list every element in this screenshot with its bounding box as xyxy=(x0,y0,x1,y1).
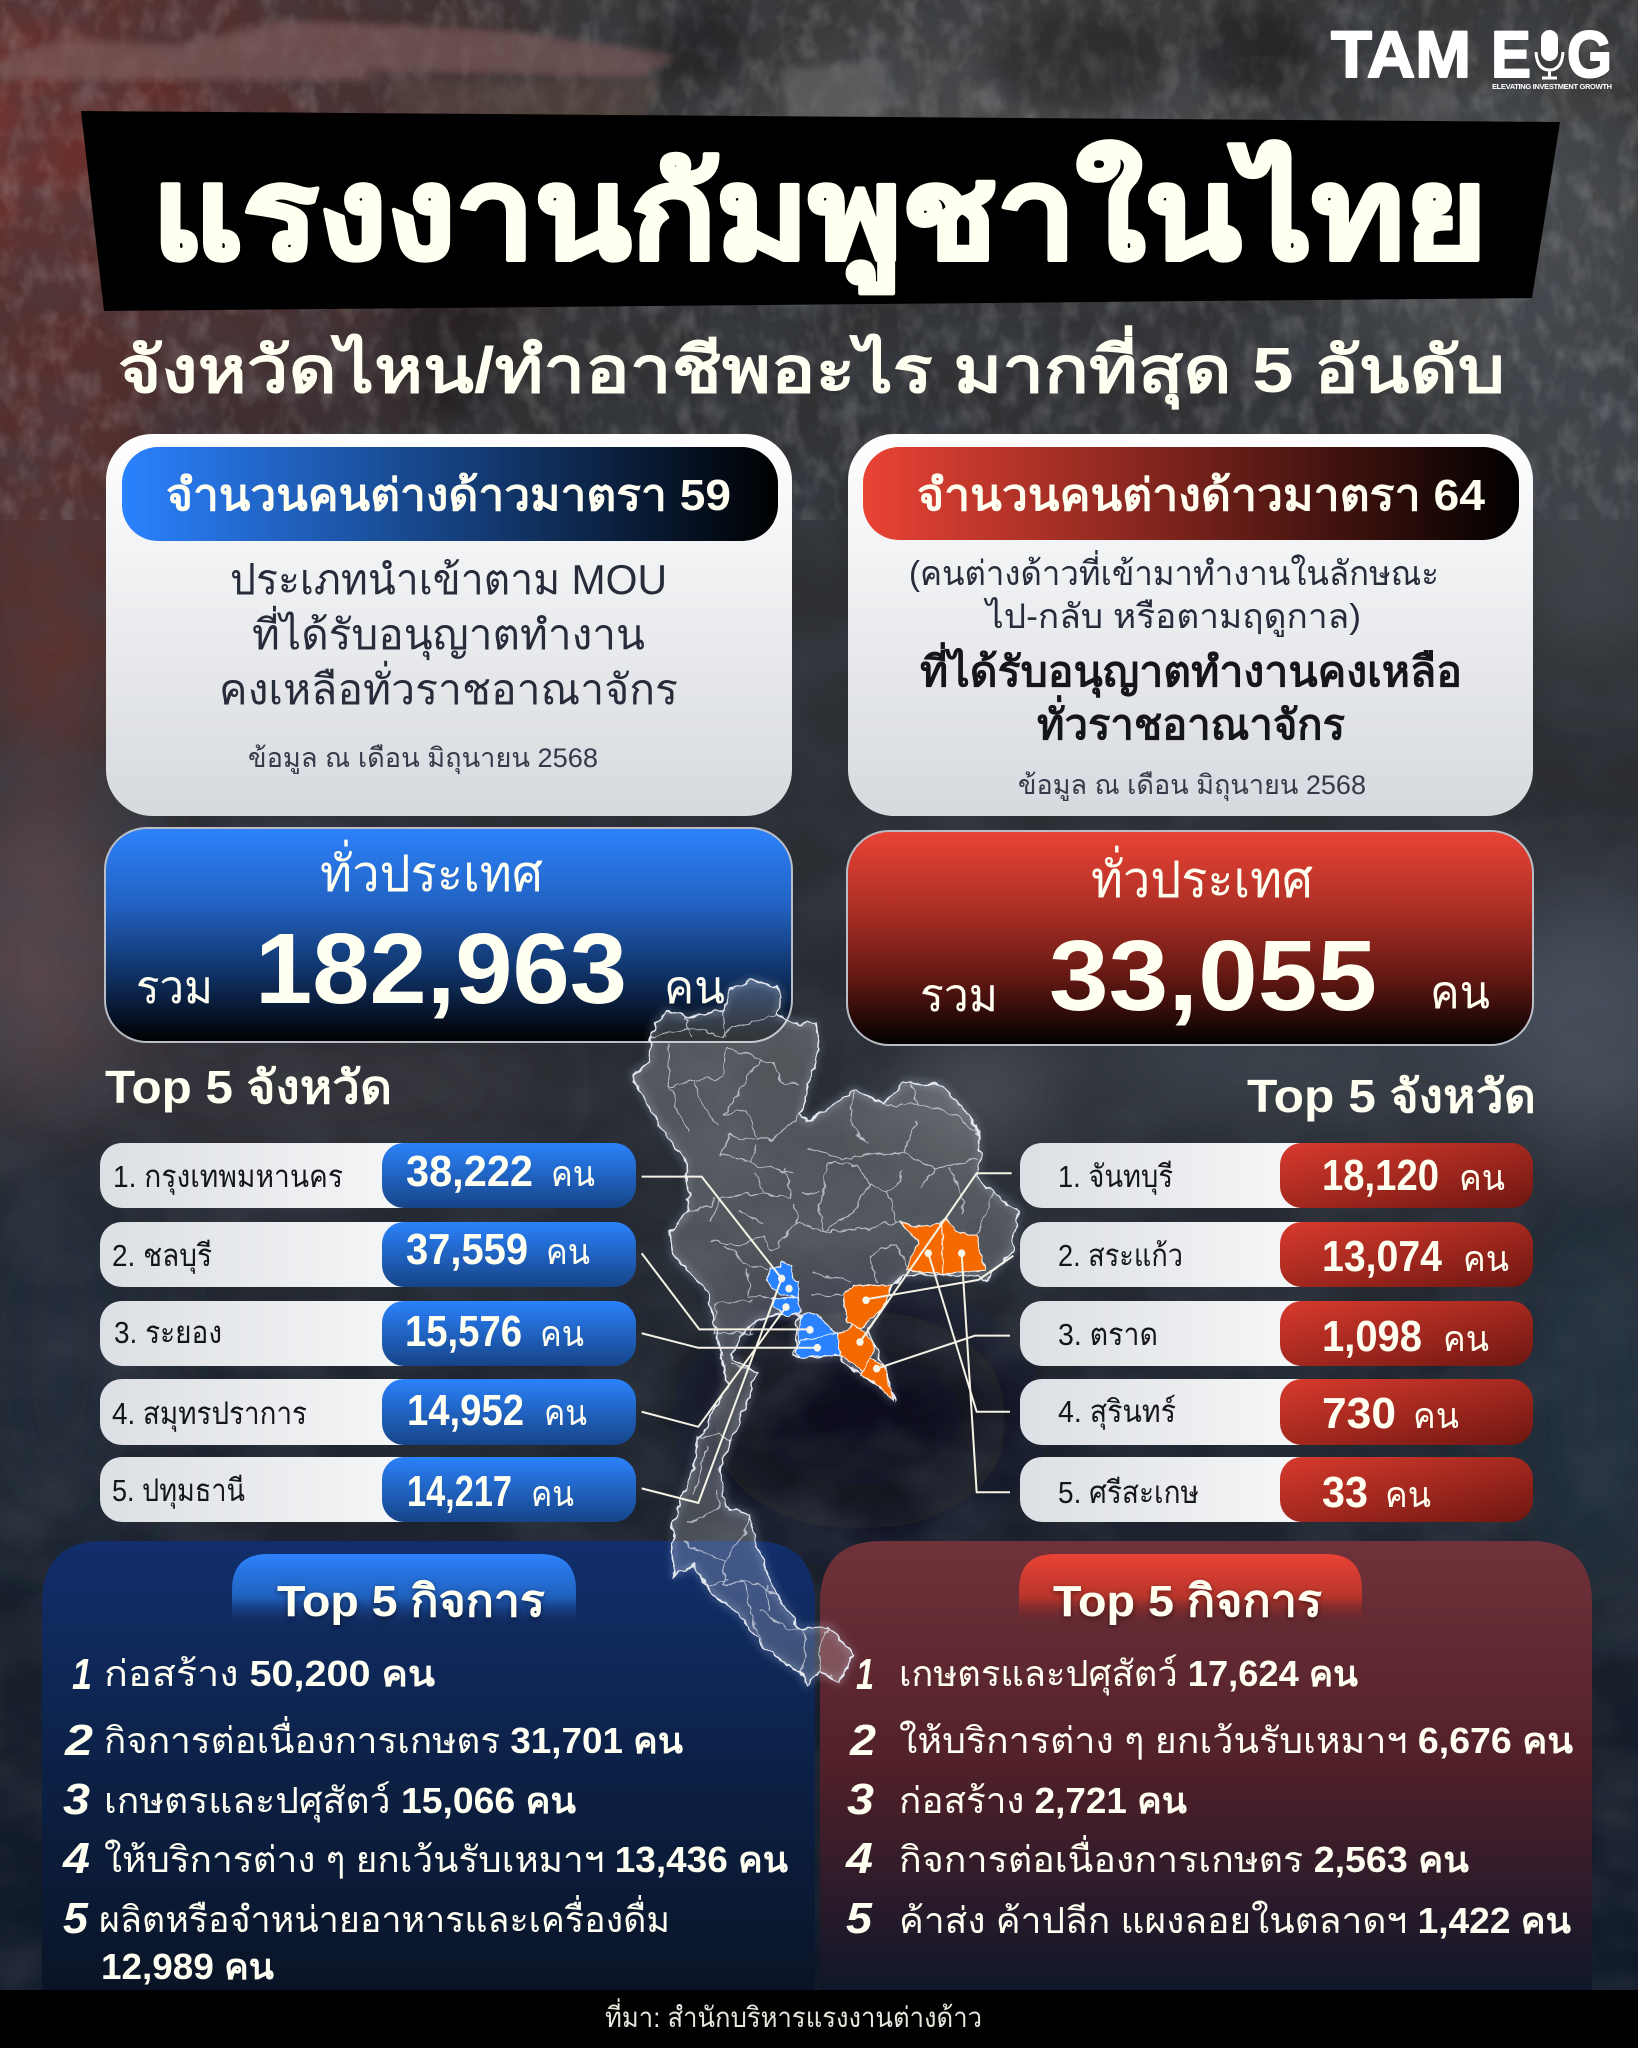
row 4 Surin xyxy=(1020,1379,1533,1445)
panel: nationwide total section 59: รวม xyxy=(136,961,213,1013)
title band: แรงงานกัมพูชาในไทย xyxy=(152,141,1487,294)
list: top 5 provinces section 59 xyxy=(100,1143,636,1522)
icon: microphone xyxy=(1536,30,1563,78)
list: top businesses section 59: 1 xyxy=(72,1650,92,1699)
row 1 Chanthaburi xyxy=(1020,1143,1533,1208)
logo: TAMEIG: ELEVATING INVESTMENT GROWTH xyxy=(1492,82,1612,91)
row 4 Samut Prakan: คน xyxy=(544,1392,587,1433)
list: top businesses section 64: 1 xyxy=(856,1650,874,1699)
row 4 Surin: 730 xyxy=(1322,1389,1396,1438)
panel: top 5 businesses section 64 background xyxy=(820,1541,1592,1990)
list: top businesses section 64: 5 xyxy=(846,1894,873,1943)
row 4 Samut Prakan: 14,952 xyxy=(407,1386,524,1435)
row 1 Bangkok: 1. กรุงเทพมหานคร xyxy=(113,1159,343,1196)
tab: top 5 businesses right: Top 5 กิจการ xyxy=(1053,1577,1322,1626)
subtitle: จังหวัดไหน/ทำอาชีพอะไร มากที่สุด 5 อันดับ xyxy=(118,325,1505,410)
footer source bar xyxy=(0,1990,1638,2048)
list: top businesses section 59: ผลิตหรือจำหน่ายอาหารและเครื่องดื่ม xyxy=(99,1895,670,1940)
title band xyxy=(81,111,1560,311)
row 1 Bangkok: คน xyxy=(551,1153,595,1194)
row 3 Trat: 1,098 xyxy=(1322,1312,1422,1361)
row 4 Samut Prakan: 4. สมุทรปราการ xyxy=(112,1396,307,1433)
panel: section 59 description xyxy=(106,434,792,816)
provinces highlighted orange xyxy=(837,1219,985,1400)
row 2 Chonburi: คน xyxy=(546,1231,590,1272)
row 3 Rayong: 15,576 xyxy=(405,1307,522,1356)
row 4 Samut Prakan xyxy=(100,1379,636,1445)
header: section 64: จำนวนคนต่างด้าวมาตรา 64 xyxy=(917,471,1486,520)
logo: TAMEIG xyxy=(1331,17,1612,91)
list: top businesses section 64: 2 xyxy=(849,1716,877,1765)
panel: nationwide total section 59: คน xyxy=(664,961,725,1013)
list: top businesses section 59 xyxy=(62,1650,788,1987)
footer source bar: ที่มา: สำนักบริหารแรงงานต่างด้าว xyxy=(605,1998,982,2033)
description text: ทั่วราชอาณาจักร xyxy=(1037,695,1345,748)
panel: nationwide total section 64: 33,055 xyxy=(1049,920,1377,1032)
list: top businesses section 59: ให้บริการต่าง ๆ ยกเว้นรับเหมาฯ 13,436 คน xyxy=(104,1839,788,1880)
list: top businesses section 64: เกษตรและปศุสัตว์ 17,624 คน xyxy=(899,1653,1358,1696)
row 1 Chanthaburi: 1. จันทบุรี xyxy=(1058,1159,1173,1196)
logo: TAMEIG: E xyxy=(1491,17,1531,91)
row 5 Pathum Thani: คน xyxy=(531,1473,574,1514)
list: top businesses section 59: 4 xyxy=(62,1834,90,1883)
row 5 Pathum Thani xyxy=(100,1457,636,1522)
data date: ข้อมูล ณ เดือน มิถุนายน 2568 xyxy=(248,743,598,775)
row 3 Trat: 3. ตราด xyxy=(1058,1317,1158,1352)
row 5 Sisaket: คน xyxy=(1385,1474,1431,1515)
row 4 Surin: 4. สุรินทร์ xyxy=(1058,1394,1176,1431)
callout lines and dots xyxy=(642,1173,1013,1503)
description text: ไป-กลับ หรือตามฤดูกาล) xyxy=(983,597,1361,637)
row 5 Sisaket xyxy=(1020,1457,1533,1522)
row 2 Sa Kaeo: 13,074 xyxy=(1322,1232,1442,1281)
panel: nationwide total section 64: คน xyxy=(1430,966,1490,1018)
list: top businesses section 59: 3 xyxy=(63,1775,90,1824)
list: top businesses section 64: ให้บริการต่าง ๆ ยกเว้นรับเหมาฯ 6,676 คน xyxy=(899,1720,1573,1761)
row 2 Sa Kaeo xyxy=(1020,1222,1533,1287)
row 3 Rayong: คน xyxy=(540,1313,584,1354)
tab: top 5 businesses left xyxy=(232,1554,576,1626)
map of Thailand xyxy=(632,980,1018,1685)
description text: ประเภทนำเข้าตาม MOU xyxy=(230,556,667,603)
description text: (คนต่างด้าวที่เข้ามาทำงานในลักษณะ xyxy=(909,550,1439,593)
panel: nationwide total section 59 xyxy=(105,828,792,1042)
logo: TAMEIG: G xyxy=(1567,17,1612,91)
list: top businesses section 59: ก่อสร้าง 50,200 คน xyxy=(104,1653,435,1694)
tab: top 5 businesses right xyxy=(1019,1554,1362,1626)
list: top businesses section 59: 5 xyxy=(63,1894,89,1943)
row 3 Rayong xyxy=(100,1301,636,1366)
row 3 Trat xyxy=(1020,1301,1533,1366)
list: top businesses section 64: ก่อสร้าง 2,721 คน xyxy=(899,1780,1187,1821)
description text xyxy=(219,556,678,713)
list: top businesses section 64: ค้าส่ง ค้าปลีก แผงลอยในตลาดฯ 1,422 คน xyxy=(899,1900,1571,1941)
row 2 Chonburi: 37,559 xyxy=(406,1225,528,1274)
row 1 Chanthaburi: 18,120 xyxy=(1322,1151,1439,1200)
row 2 Chonburi: 2. ชลบุรี xyxy=(112,1238,212,1275)
list: top businesses section 59: กิจการต่อเนื่องการเกษตร 31,701 คน xyxy=(104,1716,683,1761)
panel: top 5 businesses section 59 background xyxy=(42,1541,815,1990)
row 5 Pathum Thani: 14,217 xyxy=(407,1467,512,1516)
panel: nationwide total section 59: 182,963 xyxy=(255,913,627,1025)
provinces highlighted blue xyxy=(767,1261,840,1357)
row 2 Chonburi xyxy=(100,1222,636,1287)
row 5 Sisaket: 5. ศรีสะเกษ xyxy=(1058,1475,1199,1510)
row 2 Sa Kaeo: คน xyxy=(1463,1238,1509,1279)
list: top businesses section 59: เกษตรและปศุสัตว์ 15,066 คน xyxy=(104,1780,576,1823)
description text xyxy=(909,550,1462,748)
description text: คงเหลือทั่วราชอาณาจักร xyxy=(219,661,678,713)
row 1 Bangkok xyxy=(100,1143,636,1208)
header: section 59 xyxy=(122,447,778,541)
heading: top 5 provinces left: Top 5 จังหวัด xyxy=(105,1061,392,1113)
panel: section 64 description xyxy=(848,434,1533,816)
row 2 Sa Kaeo: 2. สระแก้ว xyxy=(1058,1238,1183,1273)
panel: nationwide total section 64 xyxy=(847,831,1533,1045)
list: top businesses section 64: 4 xyxy=(845,1834,873,1883)
logo: TAMEIG: TAM xyxy=(1331,17,1471,91)
description text: ที่ได้รับอนุญาตทำงาน xyxy=(252,606,645,661)
panel: nationwide total section 59: ทั่วประเทศ xyxy=(320,840,543,902)
row 3 Trat: คน xyxy=(1443,1318,1489,1359)
row 1 Bangkok: 38,222 xyxy=(406,1147,533,1196)
list: top 5 provinces section 64 xyxy=(1020,1143,1533,1522)
tab: top 5 businesses left: Top 5 กิจการ xyxy=(277,1577,545,1626)
data date: ข้อมูล ณ เดือน มิถุนายน 2568 xyxy=(1018,770,1366,802)
row 3 Rayong: 3. ระยอง xyxy=(114,1315,222,1350)
list: top businesses section 59: 2 xyxy=(64,1716,94,1765)
list: top businesses section 59: 12,989 คน xyxy=(101,1946,274,1987)
heading: top 5 provinces right: Top 5 จังหวัด xyxy=(1247,1070,1536,1122)
list: top businesses section 64: กิจการต่อเนื่องการเกษตร 2,563 คน xyxy=(899,1835,1469,1880)
header: section 64 xyxy=(863,447,1519,540)
header: section 59: จำนวนคนต่างด้าวมาตรา 59 xyxy=(166,471,731,520)
row 4 Surin: คน xyxy=(1413,1395,1459,1436)
list: top businesses section 64 xyxy=(845,1650,1573,1943)
row 5 Sisaket: 33 xyxy=(1322,1468,1368,1517)
panel: nationwide total section 64: ทั่วประเทศ xyxy=(1091,846,1313,908)
row 5 Pathum Thani: 5. ปทุมธานี xyxy=(112,1473,245,1510)
list: top businesses section 64: 3 xyxy=(847,1775,874,1824)
description text: ที่ได้รับอนุญาตทำงานคงเหลือ xyxy=(920,642,1462,698)
panel: nationwide total section 64: รวม xyxy=(920,969,998,1021)
row 1 Chanthaburi: คน xyxy=(1459,1157,1505,1198)
